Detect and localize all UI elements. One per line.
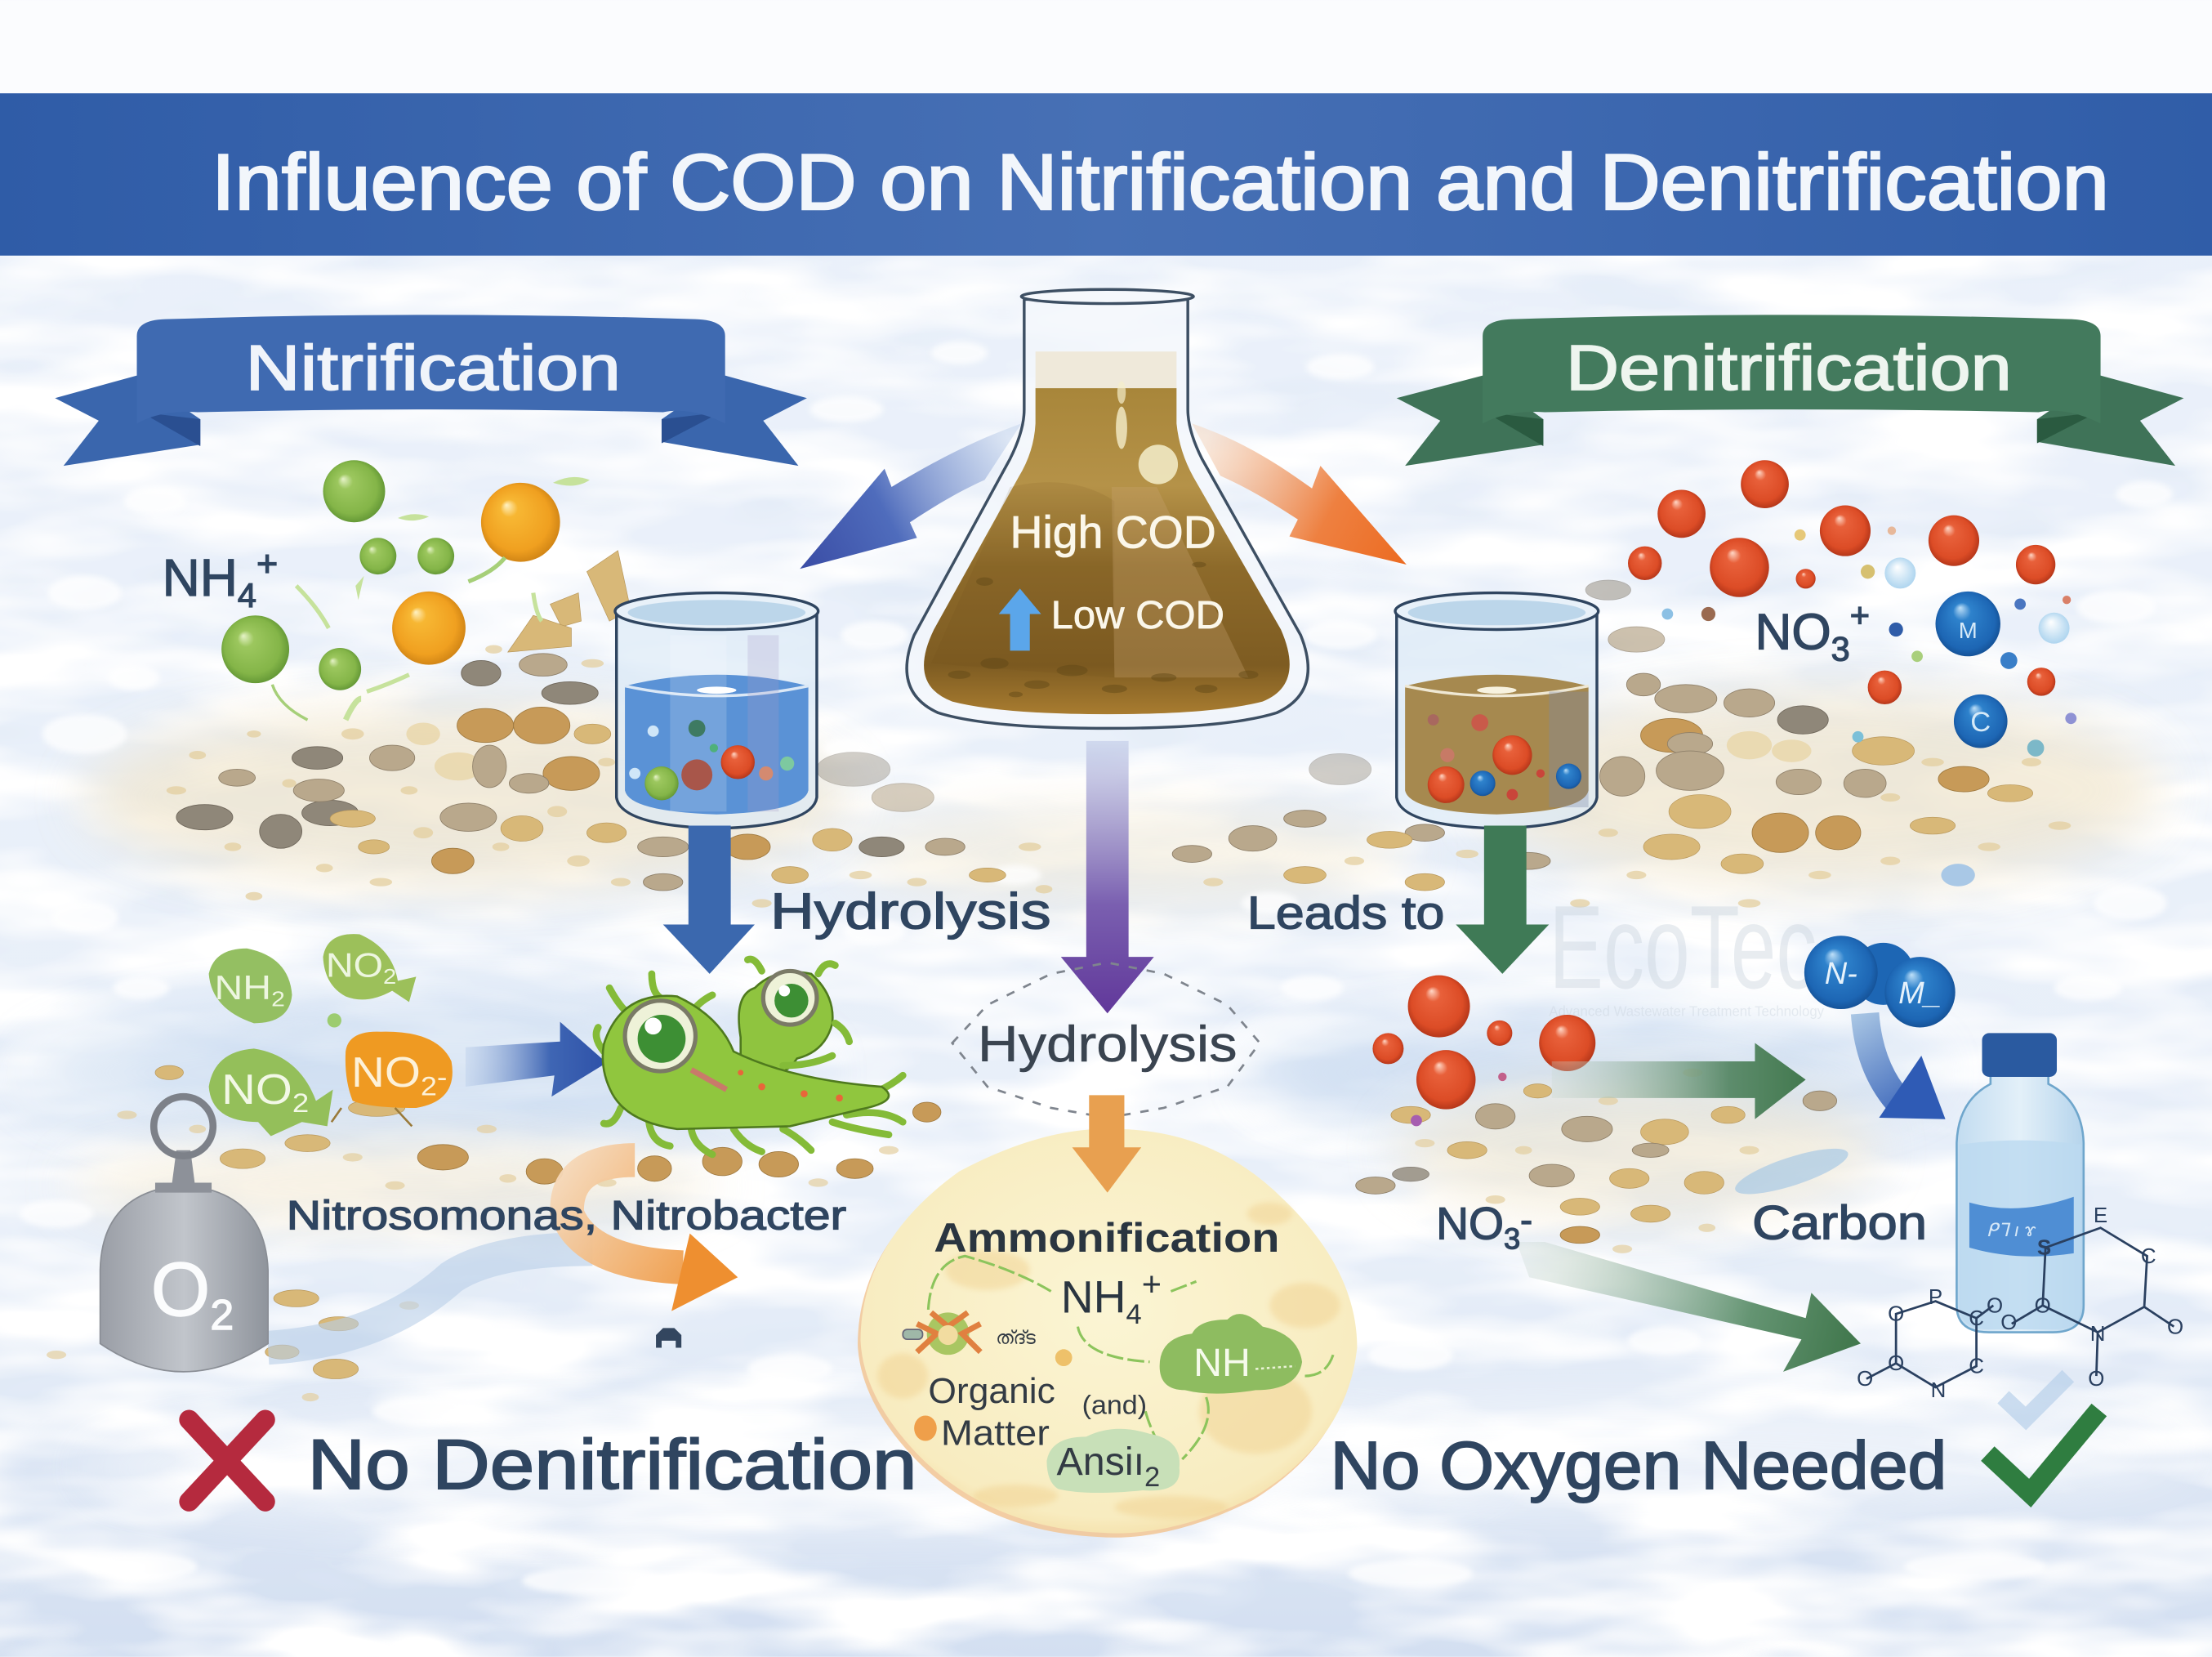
arrow: hydrolysis to ammonification: [1073, 1095, 1141, 1193]
bubbles: nitrogen species: NH: [215, 968, 263, 1007]
molecule diagram: O: [2000, 1311, 2017, 1334]
ammonification circle: (and): [1082, 1390, 1147, 1420]
molecule diagram: O: [2035, 1294, 2051, 1317]
O2 cylinder: 2: [210, 1291, 234, 1338]
label: No Oxygen Needed: No Oxygen Needed: [1331, 1427, 1947, 1503]
hydrolysis dashed hexagon: Hydrolysis: [978, 1016, 1238, 1073]
molecule diagram: S: [2037, 1237, 2051, 1260]
ribbon: Denitrification: Denitrification: [1566, 333, 2012, 404]
label: NO3-: NO: [1436, 1199, 1504, 1249]
molecule diagram: C: [1969, 1356, 1984, 1378]
ammonification circle: NH: [1061, 1271, 1126, 1322]
pale blue stream from cylinder: [268, 1249, 592, 1348]
N and M balls: N-: [1825, 957, 1857, 991]
molecule diagram: O: [1888, 1352, 1904, 1375]
beaker: high COD water: [1395, 593, 1599, 828]
ammonification circle: ത്ദ്ട: [996, 1327, 1036, 1347]
title banner: Influence of COD on Nitrification and Denitrification: [212, 138, 2109, 226]
N and M balls: [1804, 936, 1956, 1119]
molecule diagram: O: [2088, 1368, 2104, 1391]
label: Hydrolysis left: Hydrolysis: [770, 884, 1051, 940]
bubbles: nitrogen species: 2: [383, 966, 396, 989]
arrow: species to bacteria: [466, 1022, 607, 1096]
icon: microbe: [903, 1312, 980, 1355]
molecule diagram: E: [2094, 1204, 2107, 1227]
ammonification circle: 4: [1126, 1299, 1142, 1330]
ammonification circle: +: [1142, 1265, 1162, 1303]
icon: up arrow: [999, 588, 1041, 650]
cloud: NH: NH: [1193, 1341, 1251, 1385]
arrow: flask down to hydrolysis: [1061, 741, 1154, 1013]
label: NO3+: +: [1850, 596, 1870, 634]
molecule diagram: O: [1857, 1368, 1873, 1391]
label: NO3-: 3: [1504, 1222, 1520, 1256]
bottle: ᑭᒣ ı ɤ: [1987, 1220, 2036, 1240]
flask with High and Low COD: High COD: [1010, 507, 1216, 557]
cloud: Ansii2: Ansiı: [1057, 1440, 1144, 1484]
arrow: ions to carbon: [1552, 1043, 1806, 1119]
molecule diagram: P: [1929, 1286, 1942, 1309]
rocks: left field: [167, 551, 1052, 908]
molecule diagram: C: [1969, 1307, 1984, 1330]
watermark: [1549, 881, 1824, 1020]
N and M balls: M_: [1898, 976, 1942, 1011]
O2 cylinder: [100, 1096, 268, 1372]
label: NO3+: NO: [1755, 605, 1831, 661]
O2 cylinder: O: [151, 1247, 210, 1332]
ammonification circle: Ammonification: [934, 1215, 1279, 1261]
icon: green check: [1987, 1376, 2099, 1493]
ribbon: Nitrification: [55, 315, 807, 466]
molecules: NO3 cluster: [1628, 460, 2076, 757]
bubbles: nitrogen species: NO: [221, 1065, 285, 1113]
label: NH4+: 4: [238, 576, 256, 614]
ammonification circle: Organic: [928, 1372, 1055, 1411]
bottle: [1956, 1033, 2084, 1333]
bubbles: nitrogen species: 2: [271, 989, 285, 1012]
molecule diagram: C: [2141, 1245, 2156, 1268]
molecules: NH4+ cluster: [221, 460, 590, 720]
arrow: left beaker down: [663, 826, 755, 974]
label: NO3-: -: [1520, 1199, 1532, 1240]
small icon under orange arrow: [656, 1328, 681, 1348]
ammonification circle: [858, 1129, 1357, 1538]
curved orange arrow: [567, 1160, 738, 1311]
label: NH4+: NH: [163, 548, 238, 607]
molecule diagram: O: [2167, 1315, 2183, 1338]
molecule diagram: O: [1987, 1294, 2003, 1317]
label: No Denitrification: No Denitrification: [307, 1426, 917, 1504]
bacteria: [596, 959, 903, 1155]
molecules: NO3 cluster: M: [1959, 618, 1978, 643]
arrow: right beaker down: [1456, 826, 1549, 974]
arrow: flask to nitrification: [800, 423, 1021, 569]
ribbon: Denitrification: [1397, 315, 2183, 466]
molecule diagram: N: [1931, 1379, 1946, 1402]
title banner: [0, 93, 2212, 256]
molecule diagram: [1857, 1204, 2183, 1402]
molecules: NO3 cluster: C: [1970, 707, 1991, 738]
bubbles: nitrogen species: [209, 934, 453, 1136]
flask with High and Low COD: [907, 289, 1308, 728]
cloud: Ansii2: 2: [1144, 1462, 1160, 1493]
watermark: Advanced Wastewater Treatment Technology: [1549, 1003, 1824, 1020]
ribbon: Nitrification: Nitrification: [246, 333, 621, 404]
label: NO3+: 3: [1831, 629, 1850, 668]
label: NH4+: +: [256, 543, 278, 584]
arrow: flask to denitrification: [1192, 423, 1407, 565]
bubbles: nitrogen species: 2: [421, 1070, 437, 1101]
molecule diagram: O: [1888, 1303, 1904, 1326]
top white strip: [0, 0, 2212, 93]
cloud: NH: [1160, 1314, 1302, 1394]
label: Carbon: Carbon: [1752, 1197, 1927, 1250]
molecules: red ions: [1372, 976, 1595, 1126]
rocks: lower left and lower right: [47, 1065, 1853, 1401]
bubbles: nitrogen species: NO: [351, 1048, 415, 1096]
watermark: EcoTec: [1549, 881, 1817, 1013]
icon: red cross: [189, 1420, 265, 1502]
ammonification circle: Matter: [941, 1414, 1050, 1454]
flask with High and Low COD: Low COD: [1051, 593, 1224, 637]
dashed green links: [928, 1256, 1333, 1459]
cloud: Ansii2: [1046, 1429, 1180, 1493]
arrow: NO3- to molecule: [1517, 1242, 1861, 1372]
label: Nitrosomonas, Nitrobacter: Nitrosomonas, Nitrobacter: [287, 1192, 846, 1238]
bubbles: nitrogen species: NO: [326, 945, 377, 984]
bubbles: nitrogen species: -: [437, 1062, 447, 1093]
label: Leads to: Leads to: [1247, 887, 1444, 940]
rocks: right field: [1172, 580, 2071, 908]
beaker: low COD water: [615, 593, 818, 828]
molecule diagram: N: [2090, 1323, 2105, 1346]
hydrolysis dashed hexagon: [952, 962, 1260, 1118]
bubbles: nitrogen species: 2: [292, 1088, 309, 1118]
